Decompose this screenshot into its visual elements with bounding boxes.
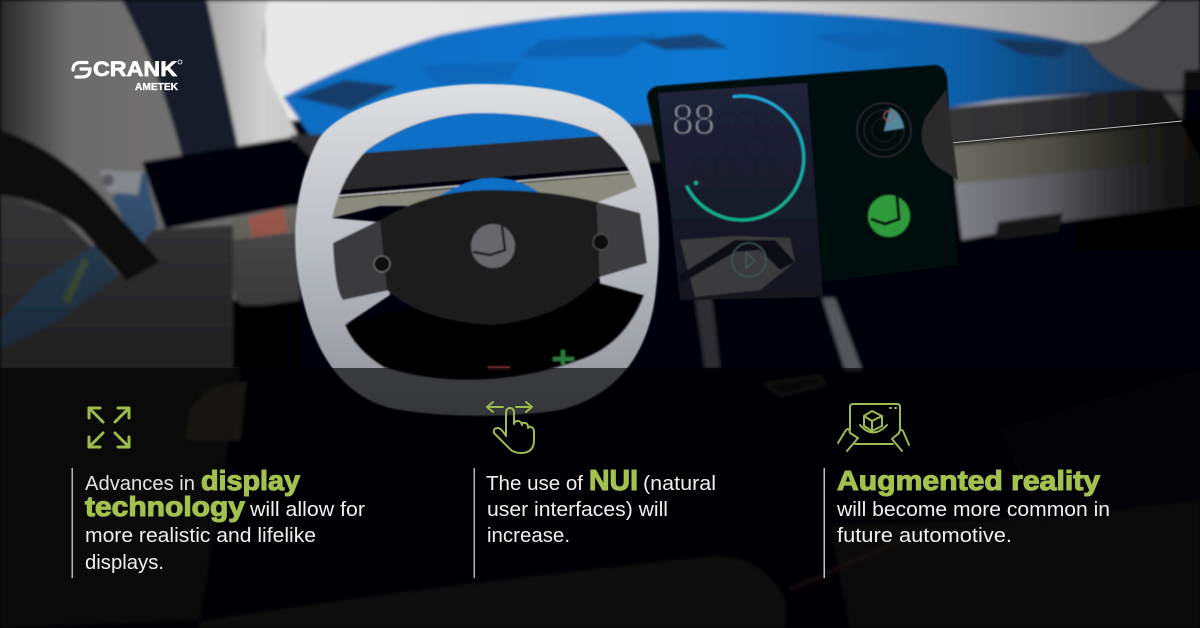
chrome line right of screen [950,121,1182,143]
red minus [488,366,510,370]
right thumb knob [593,234,609,250]
icon: swipe hand [487,402,534,453]
right side seat and floor [830,500,1200,628]
darker dash tiles [296,32,1070,110]
left door pocket [186,382,246,440]
stalk with knob [100,170,142,195]
text block: increase. [487,525,570,547]
blue dash top [283,10,1150,135]
passenger seat [200,557,785,628]
gauge dot [694,181,698,185]
text block: (natural [643,473,716,495]
hex grid of the gauge [694,112,796,201]
text block: technology [85,491,245,522]
play button [732,243,766,277]
right spoke plate [597,202,647,277]
wheel openings showing dash behind [332,113,644,377]
curved dark frame [0,130,160,281]
black shadow under band [950,121,1182,147]
lower left seat area [0,195,233,368]
shadow under left dash [233,305,303,375]
text block: NUI [589,465,638,497]
column 2: NUI [474,402,716,578]
speed digits: 88 [672,96,715,144]
hub [380,190,600,325]
divider line [72,468,73,578]
logo wordmark: CRANK [93,58,177,81]
text block [486,465,716,547]
dark stalk across panel [680,240,795,284]
left dash block [233,205,300,308]
icon: tablet with cube held by hands [838,404,909,451]
floor sweep [1000,370,1200,520]
text block: will allow for [249,499,365,521]
hub logo [471,224,515,268]
steering wheel [295,84,659,416]
column 1: display technology [72,408,365,578]
right mirror tab [1182,70,1200,120]
logo swirl mark [73,62,90,77]
screen right highlight [922,90,958,180]
text block: Augmented reality [837,465,1100,496]
text block: more realistic and lifelike [85,525,316,547]
red reflection [790,530,930,590]
small blue window patch [112,172,158,248]
divider line [824,468,825,578]
blue hub dome [435,178,538,200]
dash vent notch [994,213,1063,240]
text block [836,465,1110,547]
dark dash band [290,89,1182,185]
text block: user interfaces) will [487,499,668,521]
beige trim right [952,124,1200,184]
beige strip left of wheel [233,205,300,240]
text block: Advances in [85,473,195,495]
icon: expanding arrows [89,408,129,447]
left thumb knob [374,256,390,272]
column 3: augmented reality [824,404,1110,578]
screen body [647,65,958,300]
divider line [474,468,475,578]
registered mark [178,60,182,64]
text block: The use of [486,473,583,495]
logo: Crank Ametek [73,58,182,93]
centre touchscreen [647,65,958,300]
text block: future automotive. [837,525,1012,547]
centre console left stalk [695,298,720,368]
text block: will become more common in [836,499,1110,521]
cup handle [765,376,825,396]
lower dash right [955,158,1200,240]
side mirror display [142,137,300,229]
green plus [553,350,574,365]
green reflection in window [62,258,89,304]
pink tabs [248,208,288,238]
text block: displays. [85,552,164,574]
fade on lower left [0,200,300,368]
left floor [0,368,240,628]
dark window pillar [122,0,238,156]
left spoke plate [333,220,390,300]
wheel rim [295,84,659,416]
radar widget [857,103,911,157]
green logo on screen [868,195,910,237]
gauge ring [687,96,804,220]
media control panel [680,236,795,297]
Ametek wordmark: AMETEK [135,81,178,93]
left app panel [658,83,823,300]
lower dark overlay band [0,368,1200,628]
right console stalk [822,298,862,370]
lower left side window strip [0,245,118,350]
light A-pillar trim [207,0,300,146]
text block [85,465,365,574]
right edge fade [1050,90,1200,250]
text block: display [201,465,300,496]
